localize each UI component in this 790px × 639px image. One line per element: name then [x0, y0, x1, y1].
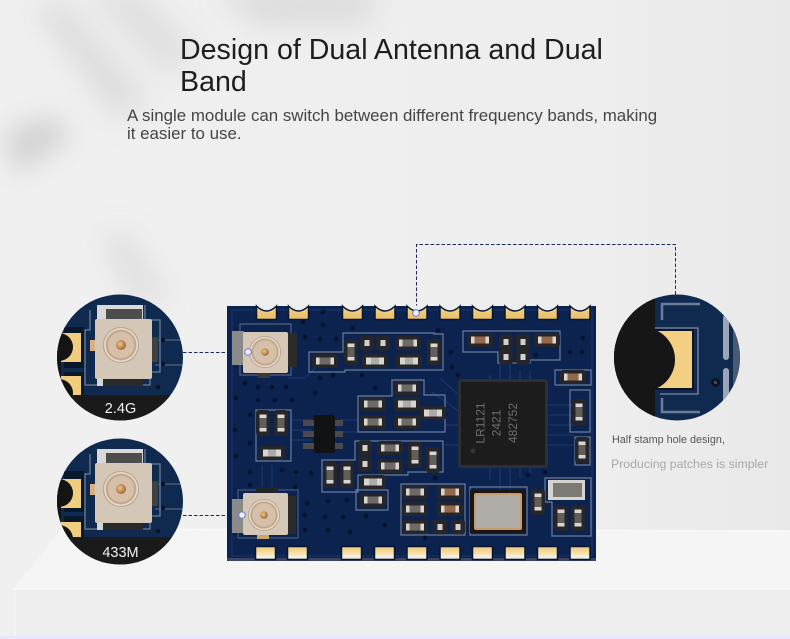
antenna connector: 433M [232, 487, 296, 539]
antenna connector: 2.4G [232, 331, 297, 378]
silkscreen outlines [238, 324, 591, 538]
board [227, 306, 596, 561]
connection dots [239, 310, 419, 518]
subtitle [127, 106, 657, 143]
crystal small [548, 480, 585, 500]
subtitle: A single module can switch between different frequency bands, making [127, 106, 657, 125]
SMD components [256, 333, 589, 534]
caption: producing patches: Producing patches is simpler [611, 457, 768, 471]
platform [0, 529, 790, 639]
LR1121 chip: 482752 [506, 403, 520, 443]
LR1121 chip: LR1121 [474, 402, 488, 444]
connector dashed lines [183, 244, 676, 516]
subtitle: it easier to use. [127, 124, 242, 143]
caption: half stamp hole design: Half stamp hole design, [612, 434, 725, 446]
SOT chip [303, 415, 343, 453]
label: 433M: 433M [102, 545, 139, 561]
vias [232, 309, 586, 541]
title [180, 34, 603, 98]
bottom castellated pads [256, 546, 590, 560]
traces [232, 340, 574, 505]
LR1121 chip [458, 379, 548, 468]
top pad notches [257, 306, 590, 310]
LR1121 chip: 2421 [490, 409, 504, 436]
title: Band [180, 66, 247, 98]
top castellated pads [256, 306, 590, 320]
PCB module [227, 306, 596, 561]
label: 2.4G: 2.4G [105, 401, 136, 417]
inset: 2.4G connector [45, 294, 183, 421]
crystal large [470, 490, 526, 533]
inset: 433M connector [45, 438, 183, 565]
inset: half stamp hole [611, 294, 741, 421]
title: Design of Dual Antenna and Dual [180, 34, 603, 66]
